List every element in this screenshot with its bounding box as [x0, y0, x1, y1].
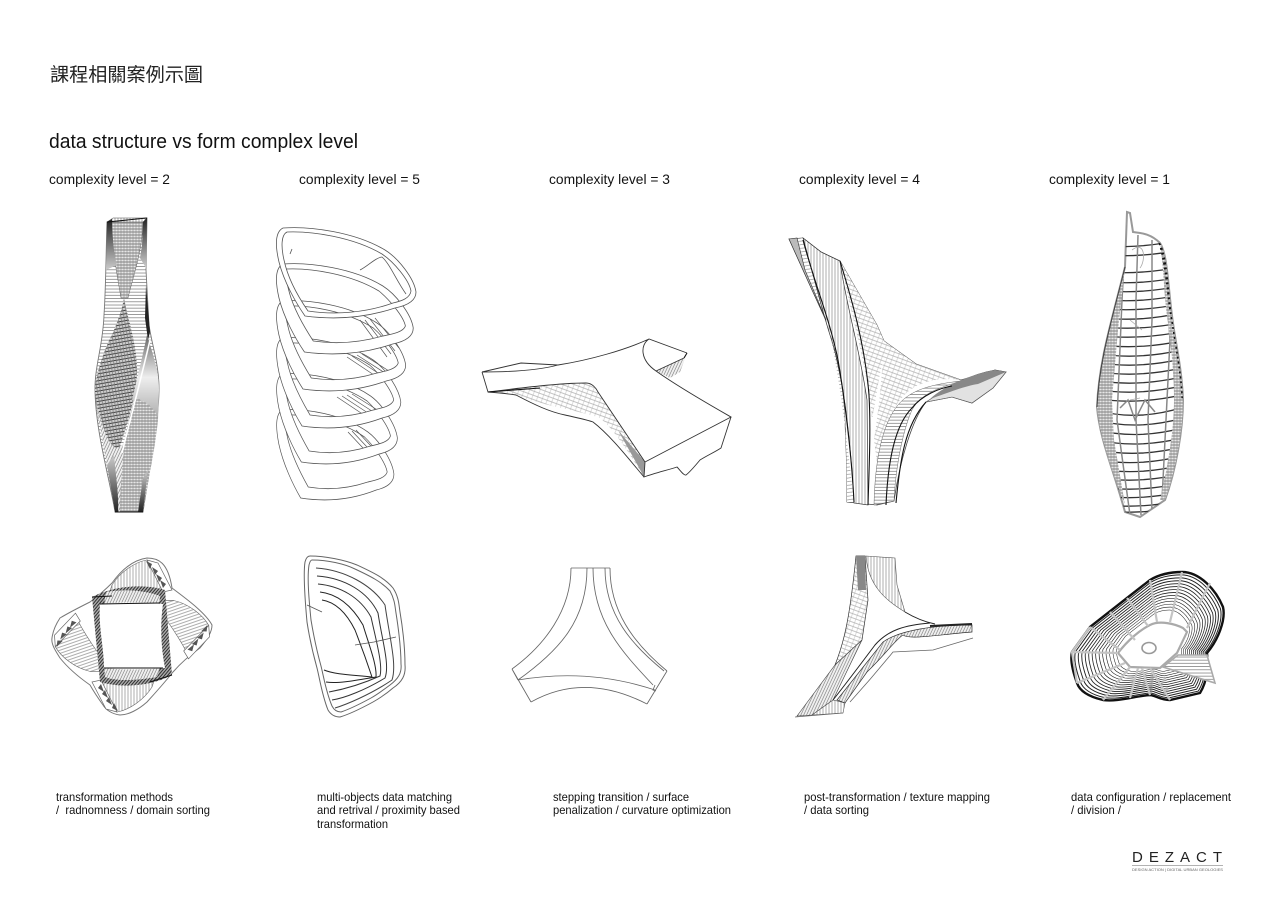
caption: column 3: stepping transition / surface [553, 790, 689, 804]
title: 課程相關案例示圖 [50, 64, 203, 86]
caption: column 4: / data sorting [804, 803, 869, 817]
caption: column 3 [553, 790, 731, 817]
caption: column 1 [56, 790, 210, 817]
column labels: complexity levels: complexity level = 5 [299, 171, 420, 187]
column labels: complexity levels: complexity level = 3 [549, 171, 670, 187]
caption: column 4 [804, 790, 990, 817]
caption: column 2: multi-objects data matching [317, 790, 452, 804]
caption: column 5: data configuration / replacement [1071, 790, 1232, 804]
caption: column 3: penalization / curvature optimization [553, 803, 731, 817]
figure: twisted tower plan [47, 558, 217, 715]
caption: column 4: post-transformation / texture mapping [804, 790, 990, 804]
column labels: complexity levels: complexity level = 2 [49, 171, 170, 187]
caption: column 1: transformation methods [56, 790, 173, 804]
figure: branching tree form plan [795, 556, 973, 717]
figure: twisted tower elevation [95, 218, 159, 512]
logo: DEZACT: DEZACT [1132, 849, 1222, 866]
caption: column 2 [317, 790, 460, 831]
logo: DEZACT: DESIGN ACTION | DIGITAL URBAN GEOLOGIES [1132, 867, 1223, 872]
figure: three-arm slab plan [512, 568, 667, 704]
caption: column 2: transformation [317, 817, 388, 831]
figure: three-arm slab elevation [482, 339, 731, 477]
caption: column 1: / radnomness / domain sorting [56, 803, 210, 817]
figure: stacked rings plan [304, 556, 405, 717]
caption: column 5 [1071, 790, 1232, 817]
column labels: complexity levels [49, 171, 1170, 187]
icon: centre oval [1142, 642, 1156, 654]
figure: stacked rings elevation [276, 228, 416, 500]
figure: ribbed vessel plan [1071, 572, 1224, 700]
figure: branching tree form elevation [789, 238, 1006, 505]
caption: column 5: / division / [1071, 803, 1122, 817]
column labels: complexity levels: complexity level = 4 [799, 171, 920, 187]
column labels: complexity levels: complexity level = 1 [1049, 171, 1170, 187]
figure: ribbed vessel elevation [1096, 210, 1184, 518]
caption: column 2: and retrival / proximity based [317, 803, 460, 817]
section heading: data structure vs form complex level [49, 131, 358, 153]
